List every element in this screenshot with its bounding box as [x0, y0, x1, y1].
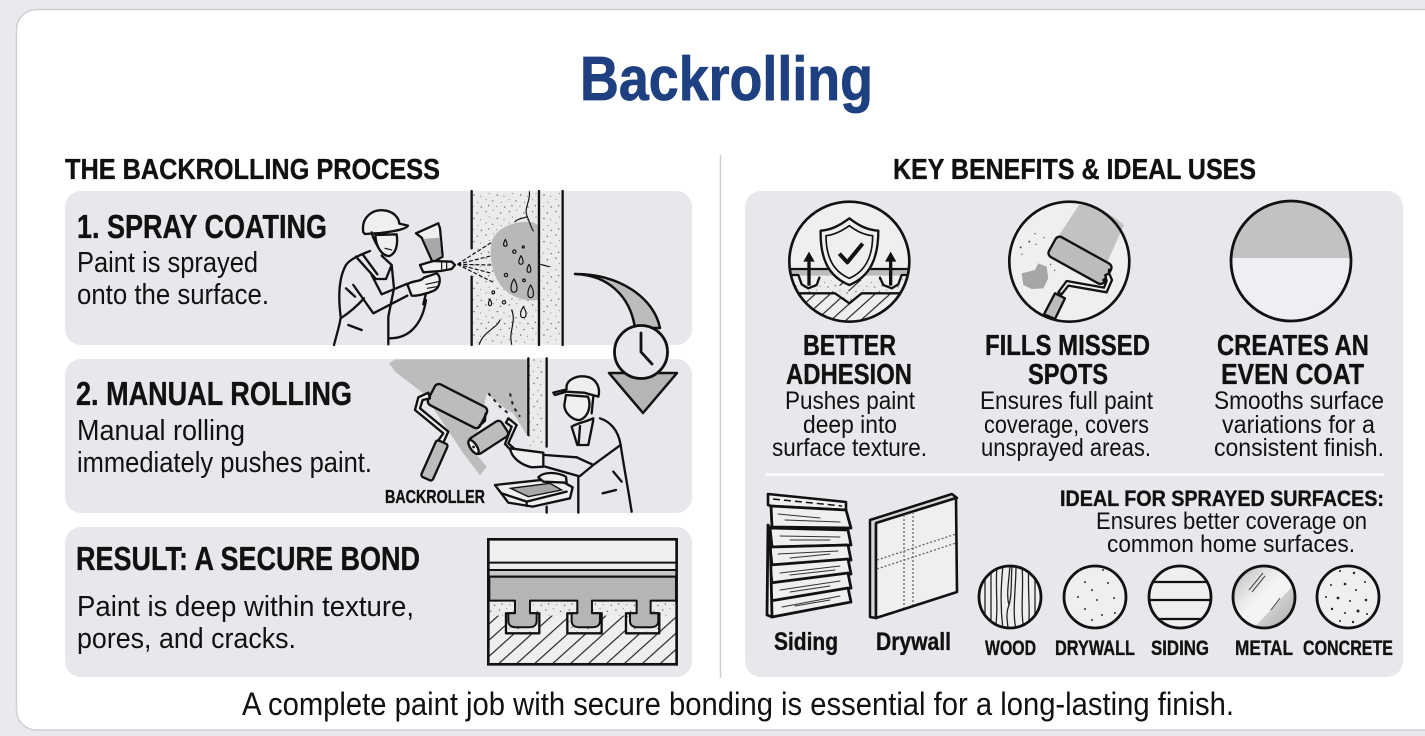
heading: the backrolling process: THE BACKROLLING PROCESS — [65, 154, 440, 186]
icon: even coat half-filled circle — [1231, 201, 1351, 321]
benefit: fills missed spots: FILLS MISSED — [985, 330, 1150, 362]
benefit: better adhesion — [772, 330, 927, 462]
icon: better adhesion shield — [787, 202, 913, 325]
heading: key benefits and ideal uses: KEY BENEFITS & IDEAL USES — [893, 154, 1256, 186]
illustration: painter spraying wall — [334, 191, 563, 345]
swatch labels: SIDING — [1151, 637, 1209, 660]
panel: manual rolling — [65, 358, 692, 513]
panel: result — [65, 527, 692, 677]
arrow head — [609, 373, 677, 413]
swatch: wood — [979, 565, 1041, 630]
benefit: better adhesion: deep into — [803, 411, 897, 439]
panel: spray coating — [65, 191, 692, 345]
footer statement: A complete paint job with secure bonding is essential for a long-lasting finish. — [242, 686, 1234, 722]
illustration: siding panels — [767, 494, 851, 617]
step 1 description: Paint is sprayed — [77, 247, 258, 279]
clock and curved waiting arrow — [575, 274, 677, 413]
swatch labels: DRYWALL — [1055, 637, 1135, 660]
ideal surfaces description: Ensures better coverage on — [1096, 508, 1367, 535]
result description: pores, and cracks. — [77, 623, 296, 655]
label: drywall: Drywall — [876, 628, 951, 656]
benefit: creates an even coat: consistent finish. — [1214, 434, 1384, 462]
result heading: RESULT: A SECURE BOND — [76, 540, 420, 577]
benefit: fills missed spots — [980, 330, 1153, 462]
benefit: creates an even coat: EVEN COAT — [1221, 359, 1364, 391]
swatch labels — [985, 637, 1393, 660]
result description: Paint is deep within texture, — [77, 591, 414, 623]
step 2 description: immediately pushes paint. — [77, 447, 372, 479]
diagram: paint bonded into surface pores — [488, 539, 677, 664]
label: siding: Siding — [774, 628, 838, 656]
illustration: painter backrolling wall — [389, 358, 632, 513]
step 1 description: onto the surface. — [77, 279, 269, 311]
benefit: creates an even coat — [1214, 330, 1384, 462]
swatch labels: METAL — [1235, 637, 1293, 660]
benefit: better adhesion: BETTER — [803, 330, 896, 362]
step 2 description: Manual rolling — [77, 415, 245, 447]
illustration: drywall sheet — [870, 494, 957, 618]
title: Backrolling — [580, 45, 873, 114]
swatch: metal — [1232, 565, 1300, 632]
benefit: fills missed spots: coverage, covers — [984, 411, 1149, 439]
benefit: creates an even coat: CREATES AN — [1217, 330, 1369, 362]
step 1 description — [77, 247, 269, 311]
step 2 heading: 2. MANUAL ROLLING — [76, 375, 352, 412]
result description — [77, 591, 414, 655]
swatch labels: CONCRETE — [1303, 637, 1393, 660]
swatch: drywall — [1064, 566, 1126, 628]
swatch labels: WOOD — [985, 637, 1036, 660]
label: backroller: BACKROLLER — [385, 486, 485, 507]
panel: key benefits and ideal uses — [745, 191, 1403, 677]
benefit: creates an even coat: Smooths surface — [1214, 387, 1384, 415]
step 1 heading: 1. SPRAY COATING — [77, 208, 327, 245]
clock icon — [614, 326, 668, 378]
ideal surfaces heading: IDEAL FOR SPRAYED SURFACES: — [1060, 486, 1384, 511]
step 2 description — [77, 415, 372, 479]
benefit: better adhesion: ADHESION — [786, 359, 912, 391]
curved arrow — [575, 274, 660, 328]
swatch: siding — [1149, 566, 1211, 628]
swatch: concrete — [1317, 566, 1379, 628]
ideal surfaces description: common home surfaces. — [1107, 531, 1355, 558]
benefit: fills missed spots: Ensures full paint — [980, 387, 1153, 415]
benefit: fills missed spots: unsprayed areas. — [981, 434, 1151, 462]
benefit: better adhesion: Pushes paint — [785, 387, 915, 415]
benefit: fills missed spots: SPOTS — [1028, 359, 1108, 391]
icon: fills missed spots roller — [1009, 202, 1129, 322]
ideal surfaces description — [1096, 508, 1367, 558]
benefit: creates an even coat: variations for a — [1222, 411, 1375, 439]
benefit: better adhesion: surface texture. — [772, 434, 927, 462]
